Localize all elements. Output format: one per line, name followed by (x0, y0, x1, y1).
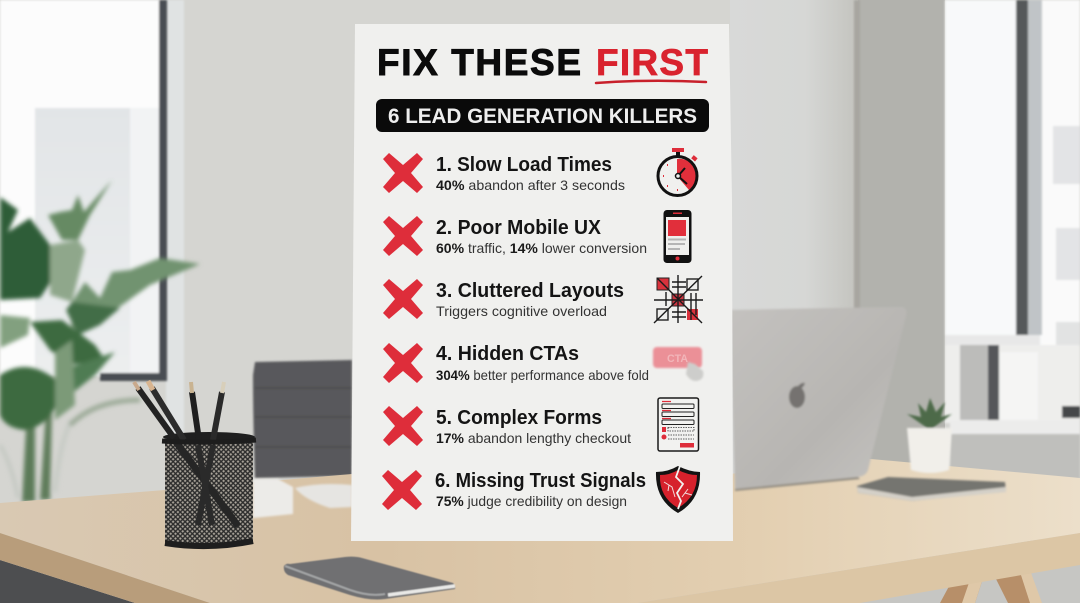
stat 6: 75% judge credibility on design (436, 493, 627, 509)
mesh body (165, 441, 253, 543)
icon: long form (658, 398, 698, 451)
heading 6: 6. Missing Trust Signals (435, 470, 646, 492)
laptop (730, 307, 906, 491)
panel: poster (351, 24, 733, 541)
icon: faded CTA button: CTA (667, 353, 688, 365)
icon: red X (383, 343, 423, 383)
smartphone on desk (284, 557, 455, 600)
stat 2: 60% traffic, 14% lower conversion (436, 240, 647, 256)
item 2 (383, 210, 692, 263)
plant (0, 180, 200, 502)
desk (0, 458, 1080, 603)
heading 3: 3. Cluttered Layouts (436, 280, 624, 302)
icon: red X (383, 216, 423, 256)
icon: red X (383, 279, 423, 319)
title: FIX THESE (377, 42, 581, 83)
item 3 (383, 275, 703, 323)
pencil cup (134, 381, 256, 546)
stat 4: 304% better performance above fold (436, 367, 649, 383)
small potted plant (907, 398, 952, 473)
notebook (857, 477, 1006, 501)
title: FIRST (596, 42, 708, 83)
icon: faded CTA button (653, 347, 703, 381)
icon: stopwatch (658, 148, 698, 196)
pencils (134, 381, 224, 440)
item 4 (383, 343, 703, 383)
heading 1: 1. Slow Load Times (436, 154, 612, 176)
stat 5: 17% abandon lengthy checkout (436, 430, 631, 446)
icon: cracked shield (656, 466, 700, 513)
item 1 (383, 148, 698, 196)
title (377, 42, 708, 83)
item 5 (383, 398, 698, 451)
icon: red X (383, 406, 423, 446)
background: right window (945, 0, 1080, 484)
heading 4: 4. Hidden CTAs (436, 343, 579, 365)
router box and mouse (253, 479, 352, 518)
chair (253, 360, 352, 478)
background: left window (0, 0, 167, 381)
item 6 (382, 466, 700, 513)
stat 3: Triggers cognitive overload (436, 303, 607, 319)
subtitle banner: 6 LEAD GENERATION KILLERS (388, 105, 697, 128)
icon: cluttered grid (654, 275, 703, 323)
icon: red X (383, 153, 423, 193)
subtitle banner (376, 99, 709, 132)
stat 1: 40% abandon after 3 seconds (436, 177, 625, 193)
icon: red X (382, 470, 422, 510)
icon: mobile phone (664, 210, 692, 263)
heading 5: 5. Complex Forms (436, 407, 602, 429)
heading 2: 2. Poor Mobile UX (436, 217, 602, 239)
